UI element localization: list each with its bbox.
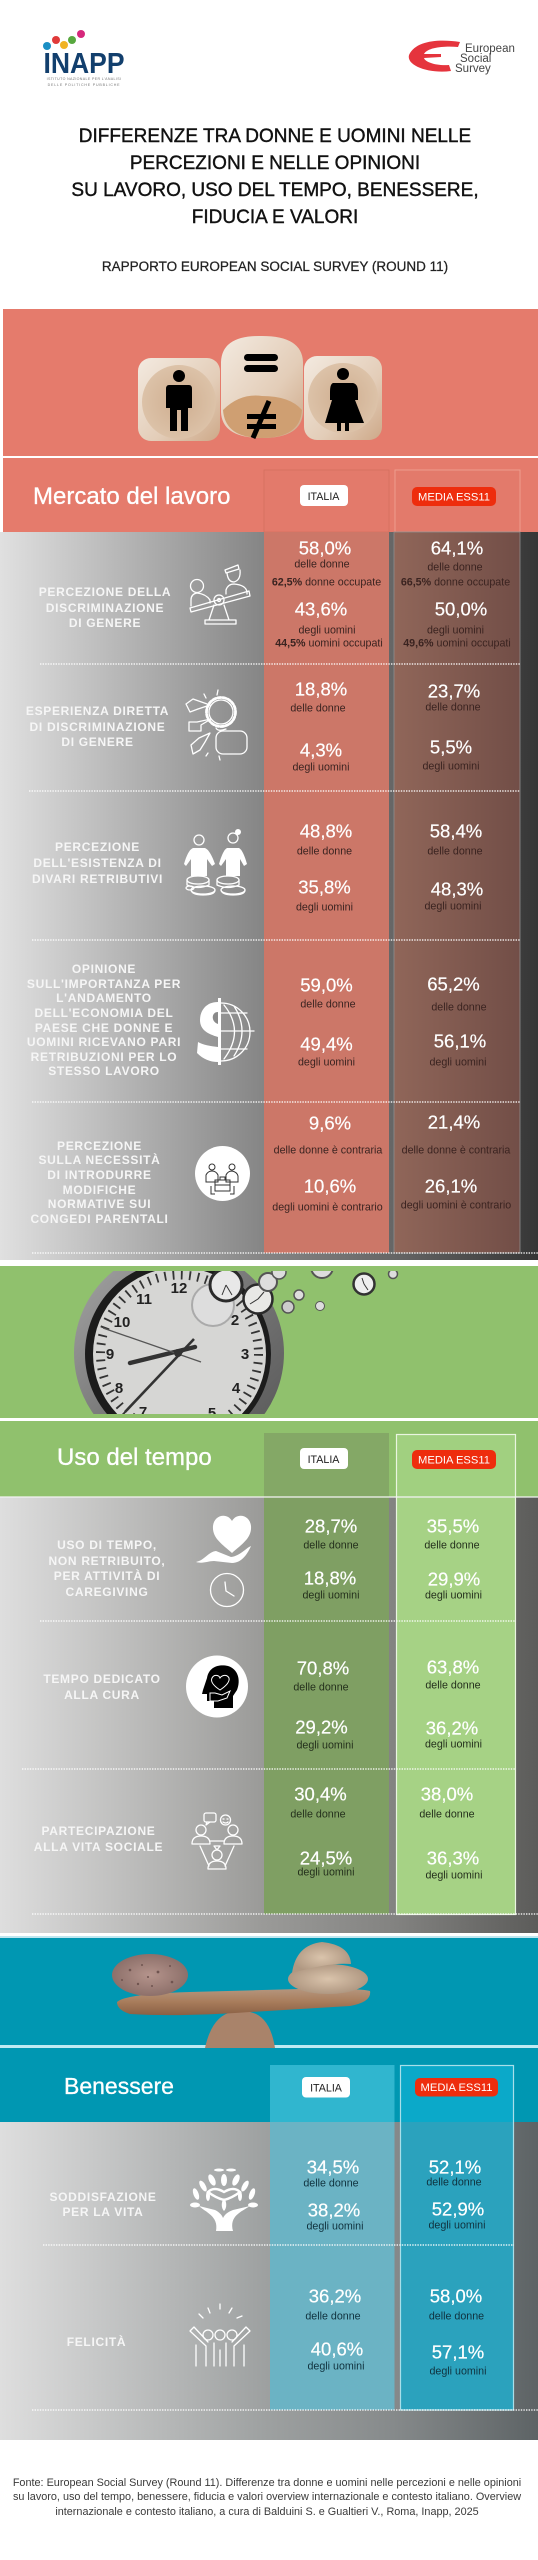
values Italia: degli uomini (298, 624, 356, 636)
pill: Italia (300, 485, 348, 506)
footer source text: Fonte: European Social Survey (Round 11). Differenze tra donne e uomini nelle percezioni e nelle opinioni (13, 2477, 521, 2489)
label: DI DISCRIMINAZIONE (30, 720, 165, 734)
label: USO DI TEMPO, (57, 1538, 157, 1552)
values Media ESS11: delle donne (424, 1540, 480, 1552)
values Italia: delle donne (290, 702, 346, 714)
values Italia: 58,0% (299, 538, 351, 558)
values Media ESS11: degli uomini è contrario (401, 1200, 511, 1212)
section header (3, 458, 538, 532)
label: STESSO LAVORO (48, 1064, 160, 1078)
label: SODDISFAZIONE (49, 2190, 157, 2204)
label: DIVARI RETRIBUTIVI (32, 872, 163, 886)
pill: Italia: ITALIA (310, 2082, 343, 2094)
values Italia: 9,6% (309, 1112, 351, 1134)
label: ALLA CURA (64, 1688, 140, 1702)
values Media ESS11: delle donne (426, 2176, 482, 2188)
values Media ESS11: degli uomini (425, 1738, 482, 1750)
values Italia: delle donne (303, 1540, 359, 1552)
label: CAREGIVING (65, 1585, 149, 1599)
values Media ESS11: 21,4% (428, 1112, 480, 1132)
values Media ESS11: delle donne (427, 562, 483, 574)
panel: mercato del lavoro (0, 309, 538, 1260)
values Italia: delle donne (290, 1808, 346, 1820)
section header: Mercato del lavoro (33, 483, 230, 510)
icon: social people (192, 1813, 242, 1869)
label: OPINIONE (72, 962, 136, 976)
label: PARTECIPAZIONE (41, 1824, 156, 1838)
title: SU LAVORO, USO DEL TEMPO, BENESSERE, (71, 180, 479, 201)
column: Media ESS11 background (400, 2122, 514, 2410)
label: PERCEZIONE DELLA (39, 585, 171, 599)
values Media ESS11: degli uomini (429, 1056, 487, 1068)
icon: die with equal and not equal (221, 336, 303, 438)
label (27, 962, 181, 1078)
row: congedi parentali (30, 1112, 511, 1226)
label: L'ANDAMENTO (56, 991, 152, 1005)
icon: pointing hands at person (186, 690, 247, 760)
label: NON RETRIBUITO, (49, 1554, 165, 1568)
label (39, 585, 171, 630)
icon: head with heart (186, 1656, 248, 1718)
label: DI GENERE (61, 735, 134, 749)
values Italia: 70,8% (297, 1658, 349, 1678)
section header (0, 2048, 538, 2122)
label: DELL'ECONOMIA DEL (35, 1006, 173, 1020)
values Italia (272, 538, 383, 650)
values Media ESS11: 57,1% (432, 2342, 484, 2362)
icon: tree (190, 2168, 258, 2231)
values Italia: degli uomini (306, 2220, 364, 2232)
values Italia: 24,5% (300, 1848, 352, 1868)
values Media ESS11 (401, 1112, 511, 1212)
values Italia: degli uomini è contrario (272, 1202, 383, 1214)
values Media ESS11: 26,1% (425, 1176, 477, 1196)
subtitle: RAPPORTO EUROPEAN SOCIAL SURVEY (ROUND 11) (102, 259, 448, 274)
logo: European Social Survey (409, 41, 515, 75)
gray table background (0, 532, 538, 1260)
values Italia: delle donne (293, 1682, 349, 1694)
label (49, 1538, 165, 1599)
values Media ESS11: 58,4% (430, 820, 482, 842)
logo: INAPP (43, 30, 124, 87)
values Italia: 48,8% (300, 820, 352, 842)
row: opinione pari retribuzioni (27, 962, 487, 1078)
values Media ESS11: degli uomini (427, 624, 484, 636)
values Media ESS11: 48,3% (431, 878, 483, 900)
values Media ESS11 (425, 1656, 482, 1750)
pill: Italia: ITALIA (308, 491, 340, 503)
banner: clock image (0, 1266, 538, 1418)
values Media ESS11: 50,0% (435, 598, 487, 620)
label: PAESE CHE DONNE E (35, 1021, 173, 1035)
pill: Media ESS11: MEDIA ESS11 (421, 2082, 492, 2094)
row: vita sociale (34, 1784, 483, 1882)
values Media ESS11: 65,2% (427, 974, 480, 994)
values Media ESS11: 56,1% (434, 1030, 486, 1052)
values Media ESS11: 38,0% (421, 1784, 473, 1804)
row: tempo dedicato alla cura (43, 1656, 482, 1752)
banner: clock image: 11 (136, 1291, 152, 1308)
values Media ESS11: 36,3% (427, 1848, 479, 1868)
gray table background (0, 1497, 538, 1933)
label: TEMPO DEDICATO (43, 1672, 161, 1686)
values Italia: 18,8% (304, 1568, 356, 1588)
values Italia: delle donne (297, 846, 352, 858)
values Italia: delle donne (300, 998, 356, 1010)
values Italia: delle donne (303, 2178, 359, 2190)
values Media ESS11: 36,2% (426, 1718, 478, 1738)
values Italia (290, 1784, 355, 1878)
values Media ESS11: 66,5% donne occupate (401, 576, 510, 588)
panel: benessere (0, 1936, 538, 2440)
values Media ESS11 (424, 1516, 482, 1602)
values Italia (303, 2156, 364, 2232)
values Italia: 62,5% donne occupate (272, 576, 381, 588)
values Media ESS11: degli uomini (425, 1590, 482, 1602)
values Italia: degli uomini (296, 1740, 354, 1752)
logo: European Social Survey: European (465, 43, 515, 55)
values Media ESS11 (426, 2156, 486, 2232)
banner: clock image: 8 (115, 1380, 123, 1397)
values Media ESS11: delle donne (429, 2310, 484, 2322)
banner: dice image (3, 309, 538, 456)
label: MODIFICHE (63, 1183, 136, 1197)
icon: happy group (190, 2304, 250, 2366)
values Media ESS11: degli uomini (429, 2366, 487, 2378)
label: DI INTRODURRE (47, 1168, 152, 1182)
values Media ESS11: delle donne (427, 846, 483, 858)
logo: INAPP: INAPP (44, 48, 124, 80)
logo: European Social Survey: Social (460, 53, 491, 65)
row: percezione della discriminazione (39, 538, 511, 650)
values Italia: 30,4% (294, 1784, 347, 1804)
label: PER ATTIVITÀ DI (54, 1568, 160, 1583)
label (32, 840, 163, 886)
pill: Italia: ITALIA (308, 1454, 340, 1466)
label: SULLA NECESSITÀ (38, 1152, 161, 1167)
values Italia: 34,5% (307, 2156, 359, 2178)
values Media ESS11: delle donne (431, 1002, 487, 1014)
row: divari retributivi (32, 820, 483, 914)
label: NORMATIVE SUI (48, 1197, 151, 1211)
values Italia: delle donne (305, 2310, 361, 2322)
values Italia: 36,2% (309, 2286, 361, 2306)
values Italia: 40,6% (311, 2338, 363, 2360)
section header (0, 1421, 538, 1497)
column: Media ESS11 background (396, 1497, 516, 1915)
title: PERCEZIONI E NELLE OPINIONI (130, 153, 420, 174)
row: soddisfazione per la vita (49, 2156, 486, 2232)
values Italia: 28,7% (305, 1516, 357, 1536)
pill: Italia (302, 2077, 350, 2098)
label: ESPERIENZA DIRETTA (26, 704, 169, 718)
values Italia: 59,0% (300, 974, 353, 996)
label (43, 1672, 161, 1702)
values Media ESS11: 29,9% (428, 1568, 480, 1590)
values Italia: 38,2% (308, 2200, 360, 2220)
column: Media ESS11 background (394, 532, 520, 1253)
values Media ESS11: 58,0% (430, 2286, 482, 2306)
values Italia (296, 820, 353, 914)
pill: Italia (300, 1448, 348, 1469)
values Italia: degli uomini (292, 762, 350, 774)
gray table background (0, 2122, 538, 2440)
values Italia (298, 974, 356, 1068)
values Media ESS11: degli uomini (428, 2220, 486, 2232)
label: DISCRIMINAZIONE (46, 601, 164, 615)
values Italia: degli uomini (296, 902, 353, 914)
values Italia: delle donne è contraria (274, 1144, 382, 1156)
values Italia: 18,8% (295, 678, 347, 700)
banner: clock image: 10 (114, 1314, 130, 1331)
label: UOMINI RICEVANO PARI (27, 1035, 181, 1049)
section header: Benessere (64, 2073, 174, 2099)
logo: INAPP: DELLE POLITICHE PUBBLICHE (48, 83, 120, 87)
icon: business people in circle (195, 1146, 250, 1201)
label (34, 1824, 163, 1854)
values Media ESS11 (427, 974, 487, 1068)
banner: clock image: 3 (241, 1346, 249, 1363)
values Italia: degli uomini (302, 1590, 360, 1602)
values Italia: 44,5% uomini occupati (275, 638, 383, 650)
logo: INAPP: ISTITUTO NAZIONALE PER L'ANALISI (47, 77, 121, 81)
title (71, 126, 479, 228)
values Media ESS11: degli uomini (425, 1870, 483, 1882)
values Media ESS11: 23,7% (428, 680, 480, 702)
pill: Media ESS11: MEDIA ESS11 (418, 1454, 490, 1466)
row: esperienza diretta (26, 678, 481, 774)
label: PERCEZIONE (55, 840, 140, 854)
values Italia: 35,8% (298, 876, 351, 898)
values Media ESS11: delle donne (419, 1808, 475, 1820)
values Italia: degli uomini (298, 1056, 355, 1068)
values Media ESS11: 63,8% (427, 1656, 479, 1678)
icon: scale with people (190, 565, 250, 624)
banner: clock image: 7 (139, 1404, 147, 1421)
label (30, 1139, 169, 1226)
footer source text: su lavoro, uso del tempo, benessere, fiducia e valori overview internazionale e contesto italiano. Overview (13, 2491, 521, 2503)
values Media ESS11 (424, 820, 483, 912)
values Italia: degli uomini (307, 2360, 365, 2372)
values Italia (302, 1516, 360, 1602)
row: caregiving (49, 1516, 482, 1606)
icon: die with man (138, 358, 220, 441)
values Italia (293, 1658, 354, 1752)
banner: clock image: 2 (231, 1312, 239, 1329)
values Media ESS11: delle donne (425, 1680, 481, 1692)
values Italia (305, 2286, 365, 2372)
section header: Uso del tempo (57, 1444, 212, 1471)
column: Italia background (264, 532, 389, 1253)
values Media ESS11 (422, 680, 481, 772)
values Italia: 10,6% (304, 1176, 356, 1196)
values Media ESS11: delle donne è contraria (402, 1144, 510, 1156)
values Media ESS11: degli uomini (424, 900, 482, 912)
values Media ESS11: 5,5% (430, 736, 472, 758)
values Italia: 29,2% (295, 1716, 348, 1738)
footer source text (13, 2477, 521, 2518)
values Media ESS11: delle donne (425, 702, 481, 714)
banner: clock image: 5 (208, 1405, 216, 1422)
label (49, 2190, 157, 2219)
icon: dollar and globe (197, 998, 254, 1065)
values Media ESS11 (419, 1784, 483, 1882)
values Media ESS11: 49,6% uomini occupati (403, 638, 511, 650)
values Media ESS11: 35,5% (427, 1516, 479, 1536)
values Italia: 49,4% (300, 1034, 353, 1054)
values Italia (272, 1112, 383, 1214)
icon: heart in hand (196, 1516, 251, 1563)
logo: European Social Survey: Survey (455, 63, 491, 75)
label: DELL'ESISTENZA DI (33, 856, 162, 870)
values Media ESS11: degli uomini (422, 760, 480, 772)
title: FIDUCIA E VALORI (192, 207, 358, 228)
banner: clock image: 12 (171, 1280, 187, 1297)
column: Italia background (270, 2122, 394, 2410)
banner: balancing stones image (0, 1936, 538, 2048)
values Italia: delle donne (294, 558, 350, 570)
banner: clock image: 4 (232, 1380, 241, 1397)
values Media ESS11: 52,1% (429, 2156, 481, 2178)
values Media ESS11 (401, 538, 511, 650)
values Italia: 43,6% (295, 598, 347, 620)
values Media ESS11: 64,1% (431, 538, 483, 558)
label: RETRIBUZIONI PER LO (31, 1050, 177, 1064)
pill: Media ESS11 (412, 487, 496, 506)
label: FELICITÀ (67, 2334, 126, 2349)
header logos and title (43, 30, 515, 274)
footer source text: internazionale e contesto italiano, a cura di Balduini S. e Gualtieri V., Roma, Inapp, 2025 (55, 2506, 479, 2518)
banner: clock image: 9 (106, 1346, 114, 1363)
values Media ESS11: 52,9% (432, 2198, 484, 2220)
values Italia: 4,3% (300, 740, 342, 760)
label: DI GENERE (69, 616, 141, 630)
title: DIFFERENZE TRA DONNE E UOMINI NELLE (79, 126, 471, 147)
label: PER LA VITA (62, 2205, 144, 2219)
column: Italia background (264, 1497, 389, 1914)
values Italia (290, 678, 350, 774)
pill: Media ESS11 (412, 1450, 496, 1469)
values Italia: degli uomini (297, 1866, 355, 1878)
pill: Media ESS11: MEDIA ESS11 (418, 492, 490, 504)
icon: clock (210, 1574, 244, 1606)
label: SULL'IMPORTANZA PER (27, 977, 181, 991)
label (26, 704, 169, 749)
icon: die with woman (304, 356, 382, 440)
row: felicità (67, 2286, 487, 2378)
label: CONGEDI PARENTALI (30, 1212, 169, 1226)
values Media ESS11 (429, 2286, 487, 2378)
label: PERCEZIONE (57, 1139, 142, 1153)
icon: people on coins (184, 829, 247, 895)
pill: Media ESS11 (415, 2078, 498, 2096)
label: ALLA VITA SOCIALE (34, 1840, 163, 1854)
panel: uso del tempo (0, 1248, 538, 1933)
